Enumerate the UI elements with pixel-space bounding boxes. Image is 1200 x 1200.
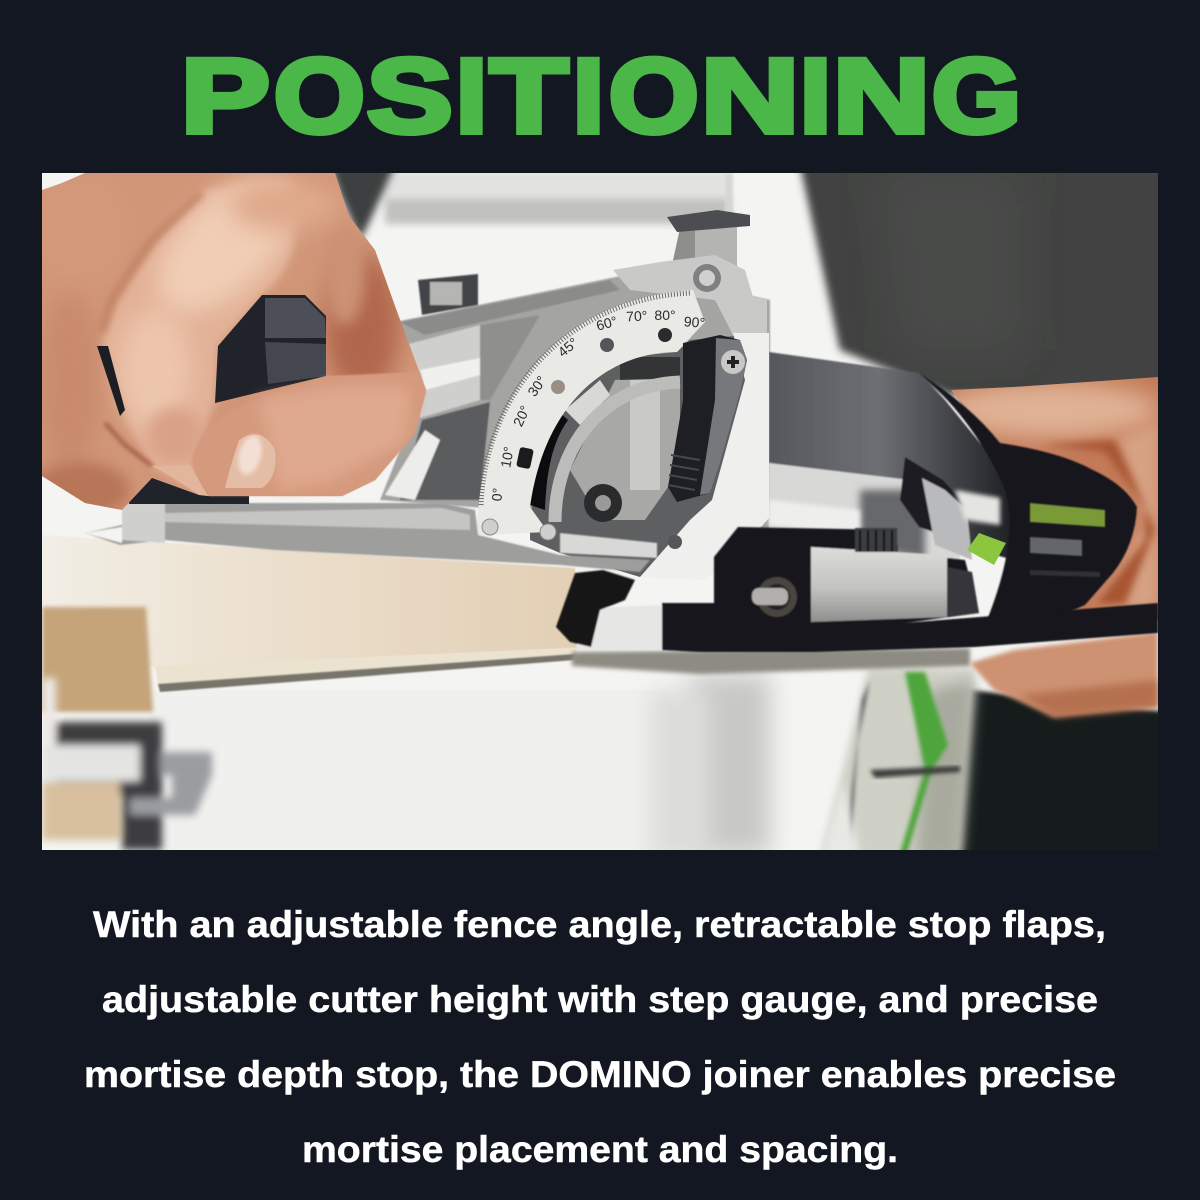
top stop bracket	[613, 210, 767, 335]
scale labels: 70°	[626, 307, 648, 325]
line 4: mortise placement and spacing.	[302, 1129, 898, 1170]
locking lever	[668, 335, 747, 502]
scale labels: 80°	[654, 307, 676, 323]
title: I	[800, 38, 831, 155]
title: O	[609, 38, 698, 155]
title: I	[456, 38, 487, 155]
scale labels: 60°	[594, 313, 619, 334]
motor housing	[769, 352, 1137, 625]
shirt	[330, 165, 1170, 395]
right hand lower	[970, 632, 1158, 717]
grip handle	[215, 295, 326, 403]
lower mechanism	[556, 527, 1158, 652]
title: O	[274, 38, 364, 155]
fist	[42, 173, 426, 510]
title: S	[367, 38, 453, 155]
line 3: mortise depth stop, the DOMINO joiner enables precise	[84, 1054, 1116, 1095]
white side plate	[640, 333, 769, 580]
clamp at lower left	[42, 678, 212, 850]
title: G	[932, 38, 1021, 155]
rear machine body	[380, 272, 770, 530]
lower grip base	[129, 478, 249, 504]
title: T	[490, 38, 568, 155]
photo background	[42, 170, 1158, 860]
title: N	[833, 38, 930, 155]
base plate	[85, 503, 657, 572]
light window inside plate	[570, 375, 680, 520]
protractor plate	[477, 210, 769, 580]
green lever	[967, 533, 1006, 565]
scale arc	[477, 290, 705, 535]
motor logo	[1030, 503, 1105, 577]
left hand	[42, 173, 427, 510]
grip handle peek	[97, 346, 125, 416]
thumbnail	[225, 434, 275, 488]
scale labels: 30°	[524, 373, 550, 399]
scale labels: 20°	[510, 403, 533, 429]
body text	[84, 904, 1116, 1170]
scale labels: 90°	[683, 313, 706, 331]
workpiece board	[42, 535, 970, 712]
line 2: adjustable cutter height with step gauge, and precise	[102, 979, 1098, 1020]
trousers	[820, 668, 1170, 860]
scale labels	[488, 307, 706, 502]
curved ring	[555, 382, 680, 522]
right hand upper	[951, 377, 1158, 620]
line 1: With an adjustable fence angle, retractable stop flaps,	[93, 904, 1106, 945]
photo: joiner in use	[30, 153, 1170, 860]
scale labels: 45°	[555, 334, 581, 360]
scale labels: 10°	[497, 445, 517, 469]
thumb	[192, 372, 426, 496]
title: N	[701, 38, 799, 155]
scale labels: 0°	[488, 487, 506, 502]
title: I	[573, 38, 604, 155]
title	[180, 38, 1021, 155]
title: P	[180, 38, 269, 155]
holes and rivets	[482, 328, 672, 540]
